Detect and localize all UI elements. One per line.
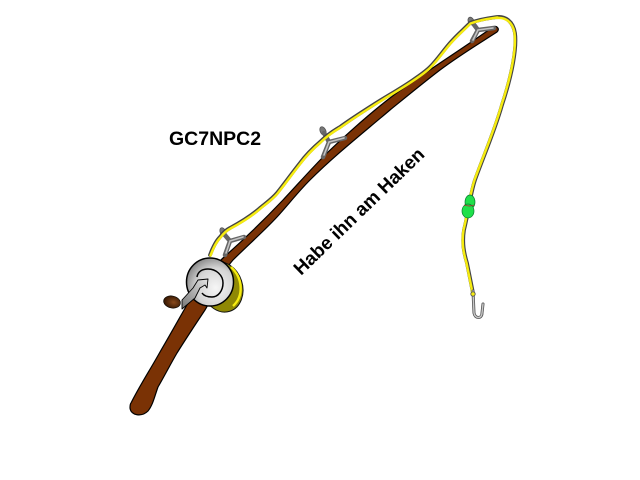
- hook: [471, 291, 483, 318]
- reel face: [186, 258, 234, 306]
- line guide: top: [467, 16, 494, 41]
- line guide: middle: [319, 126, 345, 157]
- reel handle: [162, 279, 208, 310]
- line guide: lower: [219, 227, 244, 255]
- reel spool: [195, 256, 249, 318]
- rod: [130, 26, 498, 415]
- float bobber: [462, 195, 475, 218]
- fishing line: [210, 17, 515, 293]
- label: slogan: Habe ihn am Haken: [289, 143, 428, 279]
- label: cache code: GC7NPC2: [169, 128, 261, 150]
